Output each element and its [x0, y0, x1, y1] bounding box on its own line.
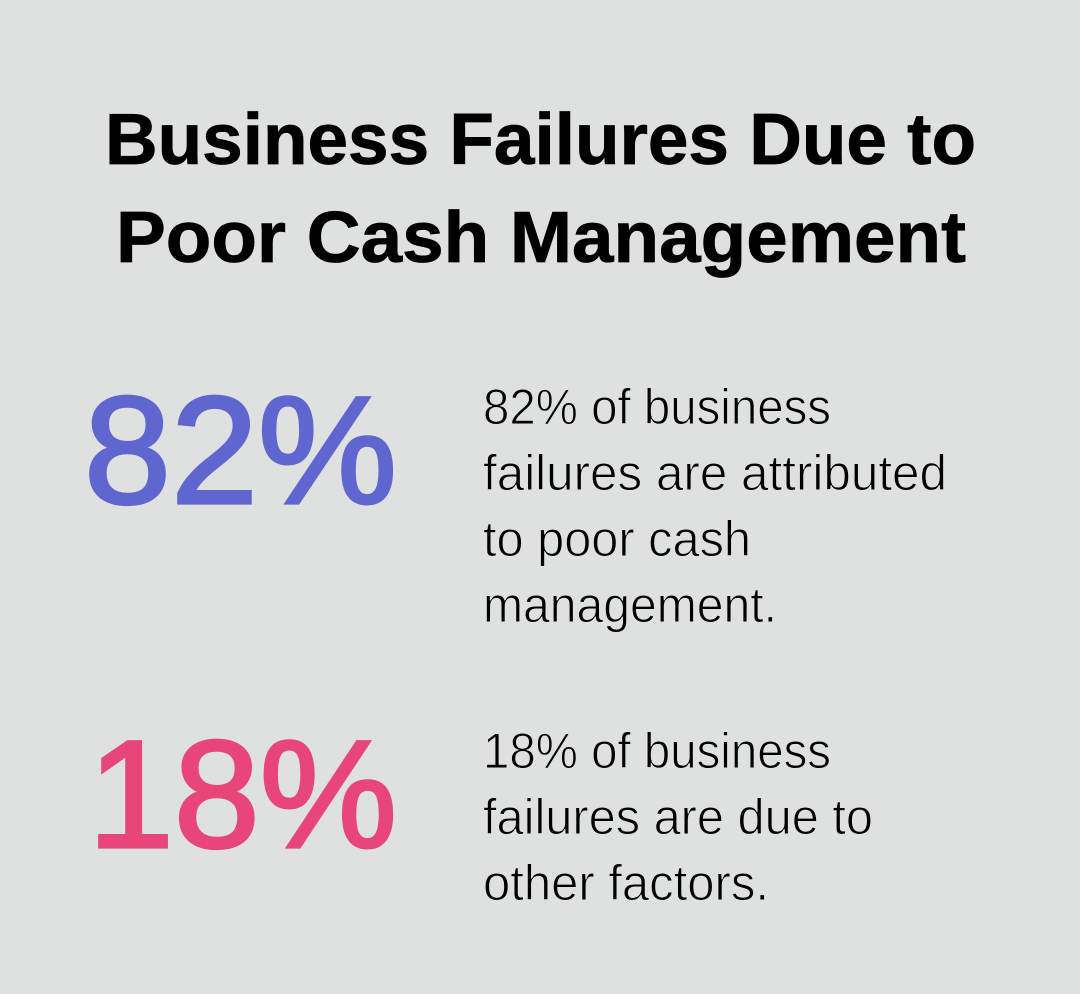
text block: 82% description: to poor cash	[483, 511, 751, 567]
stat: 82%: 82%	[84, 365, 397, 536]
text block: 18% description: 18% of business	[483, 723, 831, 779]
text block: 82% description: management.	[483, 577, 777, 633]
title: Poor Cash Management	[116, 198, 966, 278]
text block: 18% description	[483, 723, 873, 911]
title	[105, 100, 976, 278]
text block: 18% description: failures are due to	[483, 789, 873, 845]
text block: 82% description: 82% of business	[483, 379, 831, 435]
text block: 82% description	[483, 379, 947, 633]
text block: 18% description: other factors.	[483, 855, 769, 911]
title: Business Failures Due to	[105, 100, 976, 180]
text block: 82% description: failures are attributed	[483, 445, 947, 501]
stat: 18%: 18%	[88, 709, 397, 880]
